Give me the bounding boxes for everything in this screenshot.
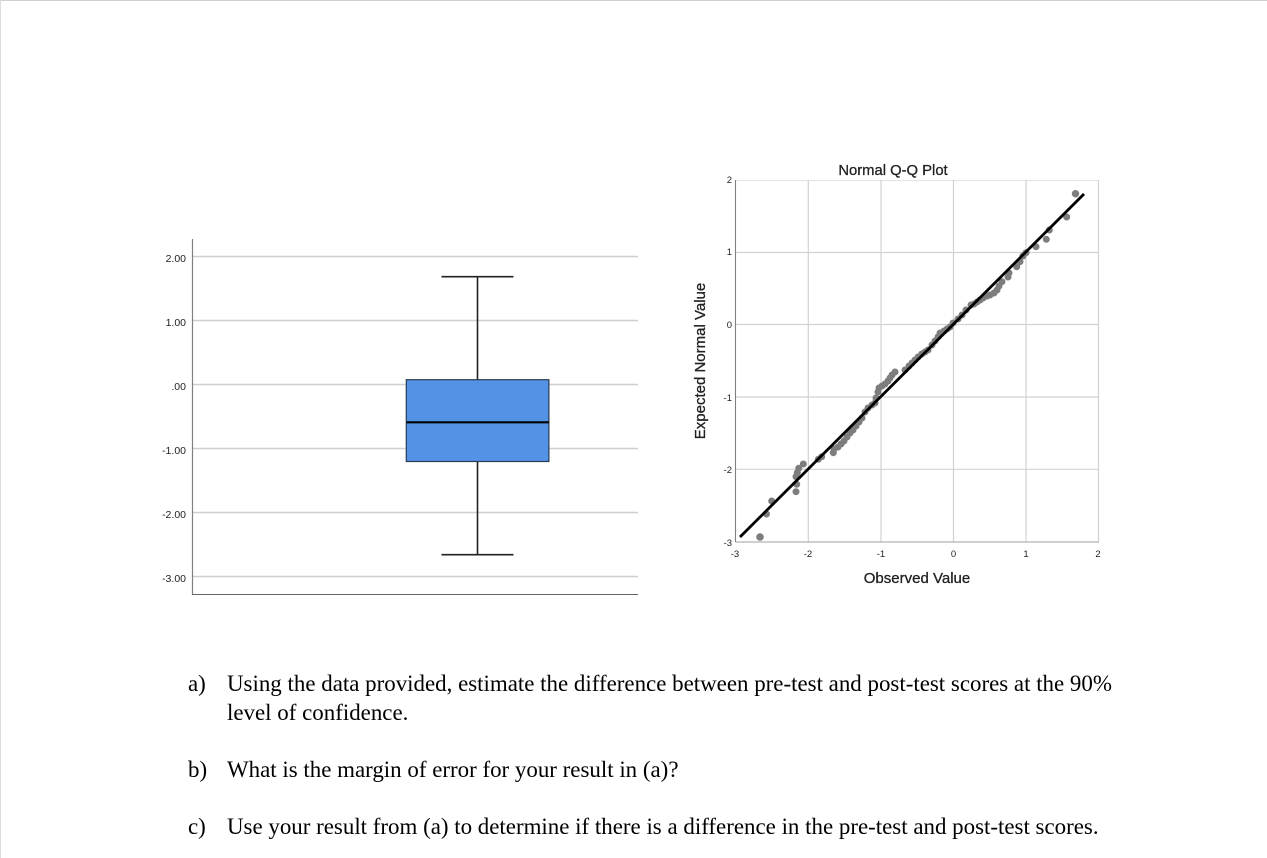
Q-Q x axis title: Observed Value: [864, 570, 970, 587]
question a: [188, 671, 1112, 725]
Q-Q x axis ticks: 2: [1095, 549, 1101, 560]
Q-Q reference line: [740, 194, 1084, 537]
Q-Q y axis ticks: -2: [724, 465, 732, 476]
Q-Q x axis ticks: -3: [731, 549, 739, 560]
Q-Q data points: [756, 190, 1079, 541]
Q-Q title: Normal Q-Q Plot: [838, 163, 948, 179]
question c: c): [188, 814, 206, 839]
box plot axis labels: [162, 253, 186, 585]
Q-Q y axis ticks: -3: [724, 538, 732, 549]
Q-Q y axis ticks: 1: [727, 247, 732, 258]
Q-Q y axis ticks: 2: [727, 175, 732, 186]
question b: b): [188, 757, 207, 782]
box plot box and median: [406, 380, 549, 462]
box plot axis labels: -1.00: [162, 445, 186, 457]
Q-Q y axis ticks: -1: [724, 393, 732, 404]
Q-Q x axis ticks: -2: [804, 549, 812, 560]
question a: a): [188, 671, 206, 696]
question a: Using the data provided, estimate the difference between pre-test and post-test scores at the 90%: [227, 671, 1112, 696]
box plot whiskers: [442, 277, 514, 555]
question b: What is the margin of error for your result in (a)?: [227, 757, 678, 782]
box plot axis labels: -3.00: [162, 573, 186, 585]
Q-Q x axis ticks: 0: [951, 549, 956, 560]
box plot axis labels: 1.00: [166, 317, 186, 329]
question c: Use your result from (a) to determine if there is a difference in the pre-test and post-test scores.: [227, 814, 1099, 839]
Q-Q x axis ticks: -1: [877, 549, 885, 560]
Q-Q y axis ticks: [724, 175, 732, 549]
box plot axis labels: -2.00: [162, 509, 186, 521]
Q-Q y axis ticks: 0: [727, 320, 732, 331]
normal Q-Q plot: [692, 163, 1101, 587]
question a: level of confidence.: [227, 700, 408, 725]
box plot axis labels: .00: [171, 381, 186, 393]
box plot axis labels: 2.00: [166, 253, 186, 265]
Q-Q y axis title: Expected Normal Value: [692, 283, 709, 439]
Q-Q x axis ticks: 1: [1023, 549, 1029, 560]
Q-Q x axis ticks: [731, 549, 1101, 560]
box plot: [162, 239, 638, 595]
